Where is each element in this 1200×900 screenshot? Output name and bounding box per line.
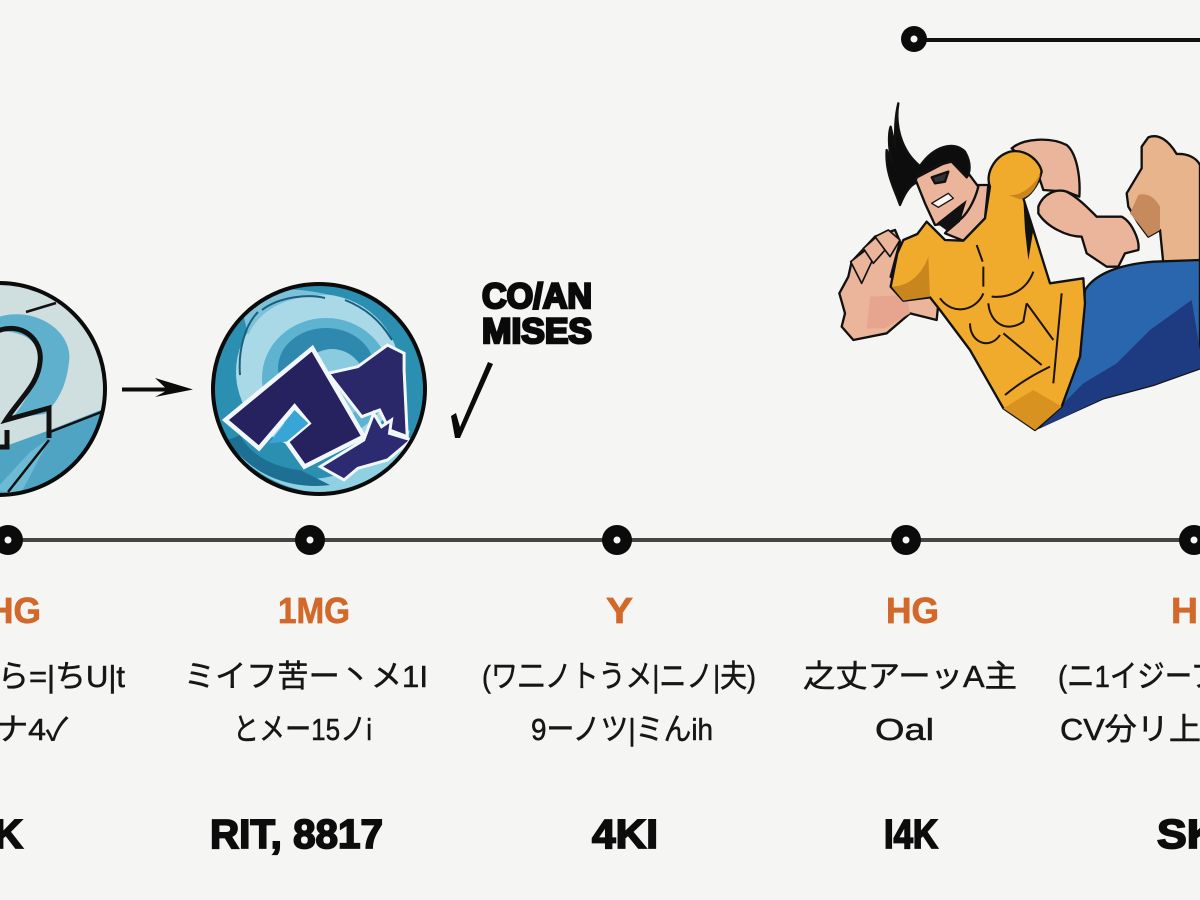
column 2 text: 1MG: [278, 590, 350, 631]
shirt: [891, 151, 1085, 430]
trousers: [1035, 260, 1200, 429]
column 2 text: とメー15ノi: [233, 712, 372, 747]
column 4 text: I4K: [884, 811, 938, 857]
leg and foot: [1127, 136, 1200, 263]
column 1 text: ら=|ちU|t: [0, 659, 125, 694]
callout text: CO/AN: [482, 277, 592, 316]
icon: wave globe with navy shape: [205, 280, 435, 500]
hair: [886, 103, 970, 205]
callout text: MISES: [482, 312, 592, 351]
front arm and fist: [839, 230, 938, 340]
column 3 text: 4KI: [592, 811, 658, 857]
navy shape: left block: [225, 348, 364, 467]
navy shape: right wing: [328, 345, 407, 437]
head: [915, 158, 978, 225]
column 1 text: [0, 590, 125, 857]
column 2 text: [184, 590, 428, 857]
column 3 text: [482, 590, 756, 857]
column 5 text: [1058, 590, 1200, 857]
node 1: [0, 525, 23, 555]
icon: circle with number 2: [0, 280, 110, 500]
column 2 text: ミイフ苦ー丶メ1I: [184, 659, 428, 694]
column 2 text: RIT, 8817: [210, 811, 383, 857]
column 4 text: 之丈アーッA主: [803, 659, 1017, 694]
node 5: [1179, 525, 1200, 555]
column 3 text: Y: [606, 590, 633, 631]
node 3: [602, 525, 632, 555]
upper back arm: [1012, 140, 1080, 197]
column 4 text: [803, 590, 1017, 857]
eye and mouth: [932, 172, 948, 183]
column 3 text: 9ーノツ|ミんih: [531, 712, 713, 747]
node 2: [295, 525, 325, 555]
icon: check mark: [451, 362, 493, 438]
column 3 text: (ワ二ノトうメ|ニノ|夫): [482, 659, 756, 694]
callout text: [482, 277, 592, 351]
forearm: [1038, 191, 1139, 267]
column 4 text: Oal: [875, 712, 934, 747]
fist fingers: [851, 230, 900, 283]
node 4: [891, 525, 921, 555]
navy shape: lower jagged: [320, 413, 411, 480]
comic figure: [839, 103, 1200, 430]
beard shadow: [937, 200, 967, 232]
column 4 text: HG: [886, 590, 939, 631]
arrow: [122, 378, 193, 397]
neck: [945, 185, 988, 241]
top timeline connector: [901, 26, 1200, 52]
blue accent: [269, 410, 308, 443]
muscle lines: [940, 245, 1062, 395]
timeline: [0, 525, 1200, 555]
